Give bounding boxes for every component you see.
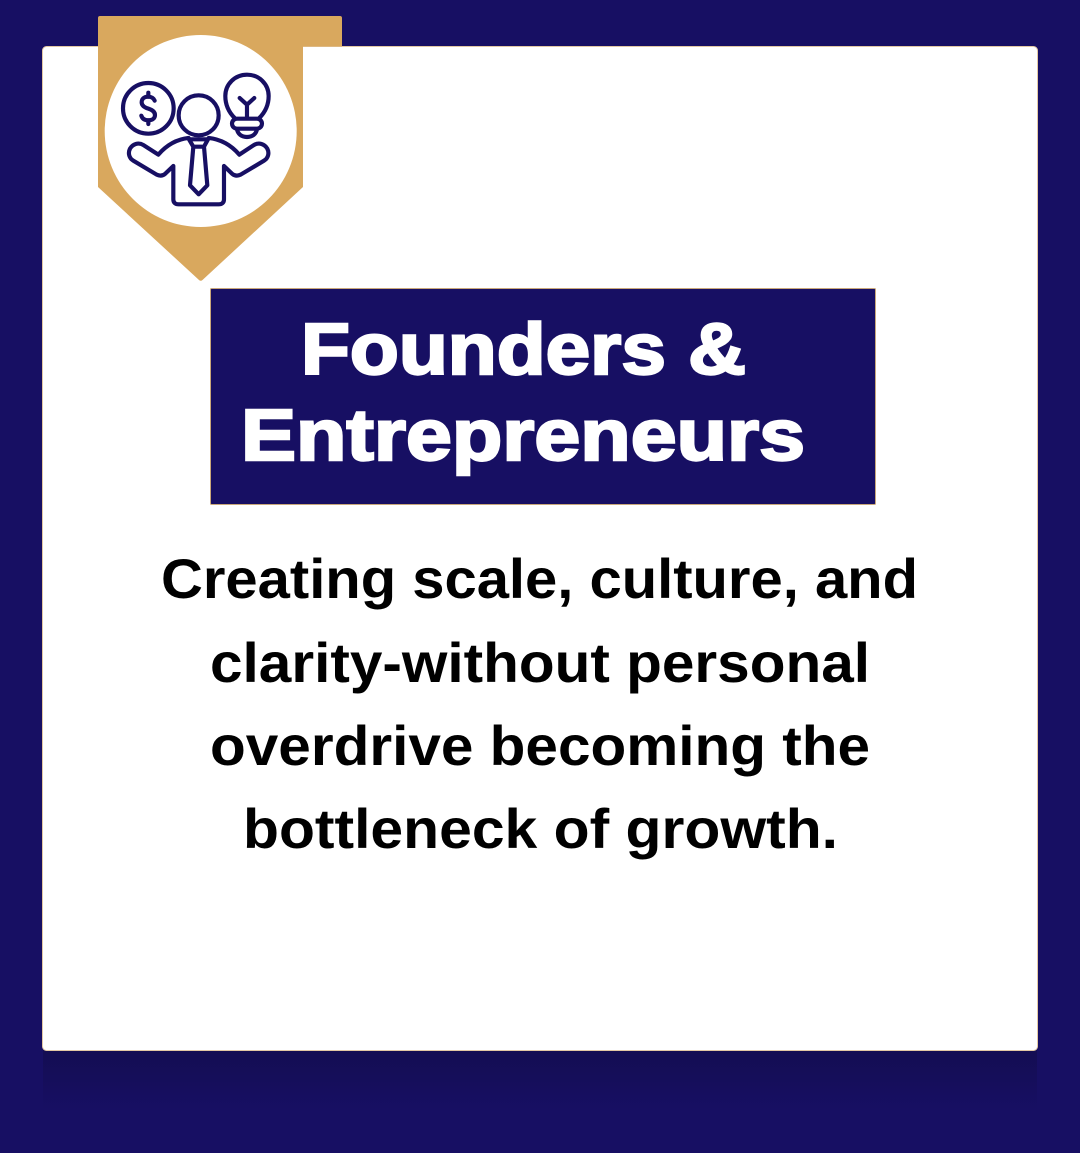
icon: person head xyxy=(179,95,219,135)
heading line 2: Entrepreneurs xyxy=(241,396,805,476)
badge shape xyxy=(98,16,342,281)
icon: dollar coin xyxy=(123,83,174,134)
card shadow xyxy=(43,1050,1037,1110)
icon: light bulb xyxy=(225,75,269,137)
heading box xyxy=(210,288,876,504)
body line 4: bottleneck of growth. xyxy=(243,797,838,860)
badge: gold pennant with icon xyxy=(98,16,342,281)
heading background xyxy=(210,288,876,504)
badge circle xyxy=(105,35,297,227)
body line 1: Creating scale, culture, and xyxy=(161,547,918,610)
icon: necktie xyxy=(189,139,208,194)
body text xyxy=(161,547,918,860)
heading line 1: Founders & xyxy=(301,310,746,390)
body line 3: overdrive becoming the xyxy=(210,714,870,777)
body line 2: clarity-without personal xyxy=(210,631,870,694)
icon: founder with dollar coin and light bulb xyxy=(123,75,269,204)
icon: person body and arms xyxy=(129,138,268,204)
